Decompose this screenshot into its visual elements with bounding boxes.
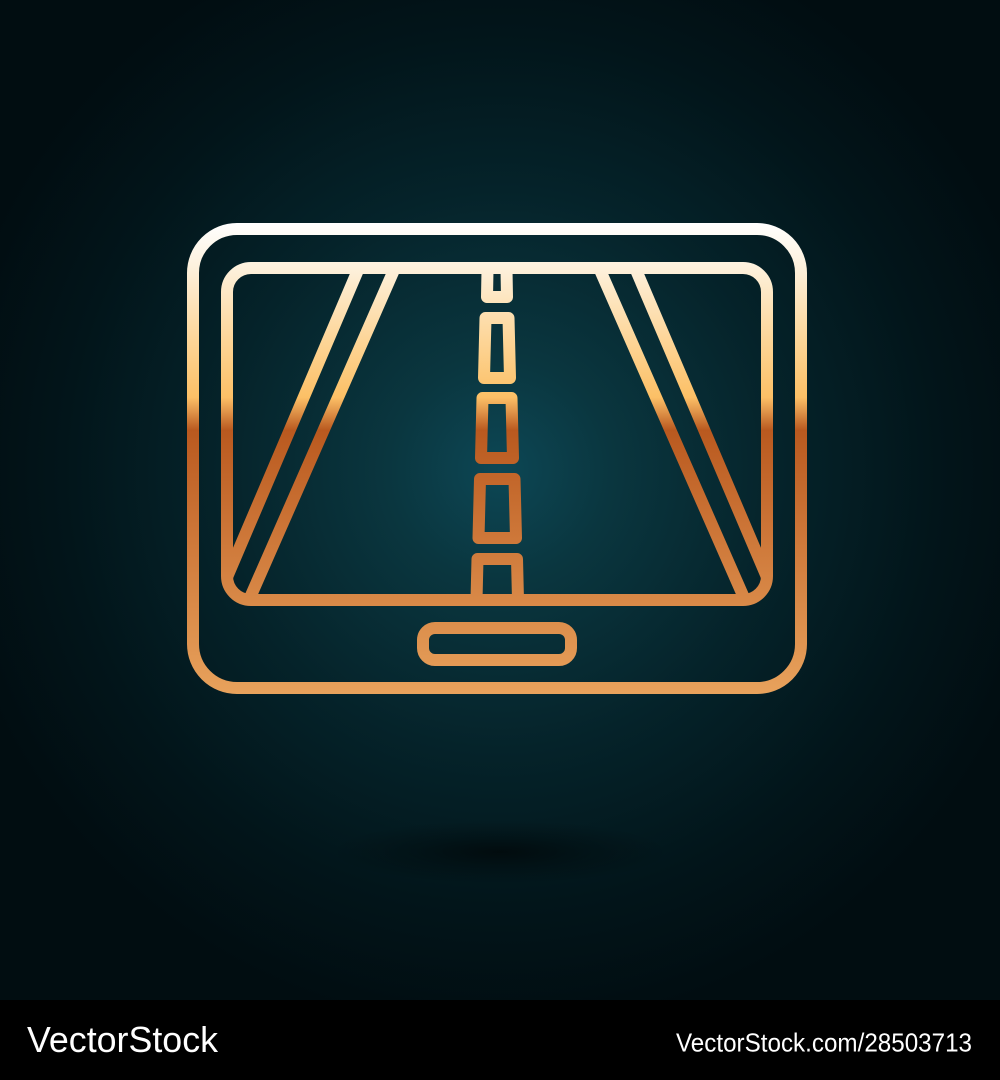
road centre dash 4 xyxy=(478,479,516,538)
footer brand name: VectorStock xyxy=(27,1019,219,1060)
road centre dash 2 xyxy=(484,318,510,378)
road centre dash 1 xyxy=(487,270,507,297)
road centre dash 3 xyxy=(481,398,513,458)
icon: GPS navigator xyxy=(193,229,801,688)
right road edge lines xyxy=(600,270,766,600)
road centre dash 5 xyxy=(476,559,518,600)
footer image URL: VectorStock.com/28503713 xyxy=(676,1028,972,1058)
screen frame xyxy=(227,268,767,600)
device home button xyxy=(423,628,571,660)
left road edge lines xyxy=(228,270,394,600)
device outer frame xyxy=(193,229,801,688)
ground shadow under icon xyxy=(330,820,670,884)
watermark footer bar xyxy=(0,1000,1000,1080)
